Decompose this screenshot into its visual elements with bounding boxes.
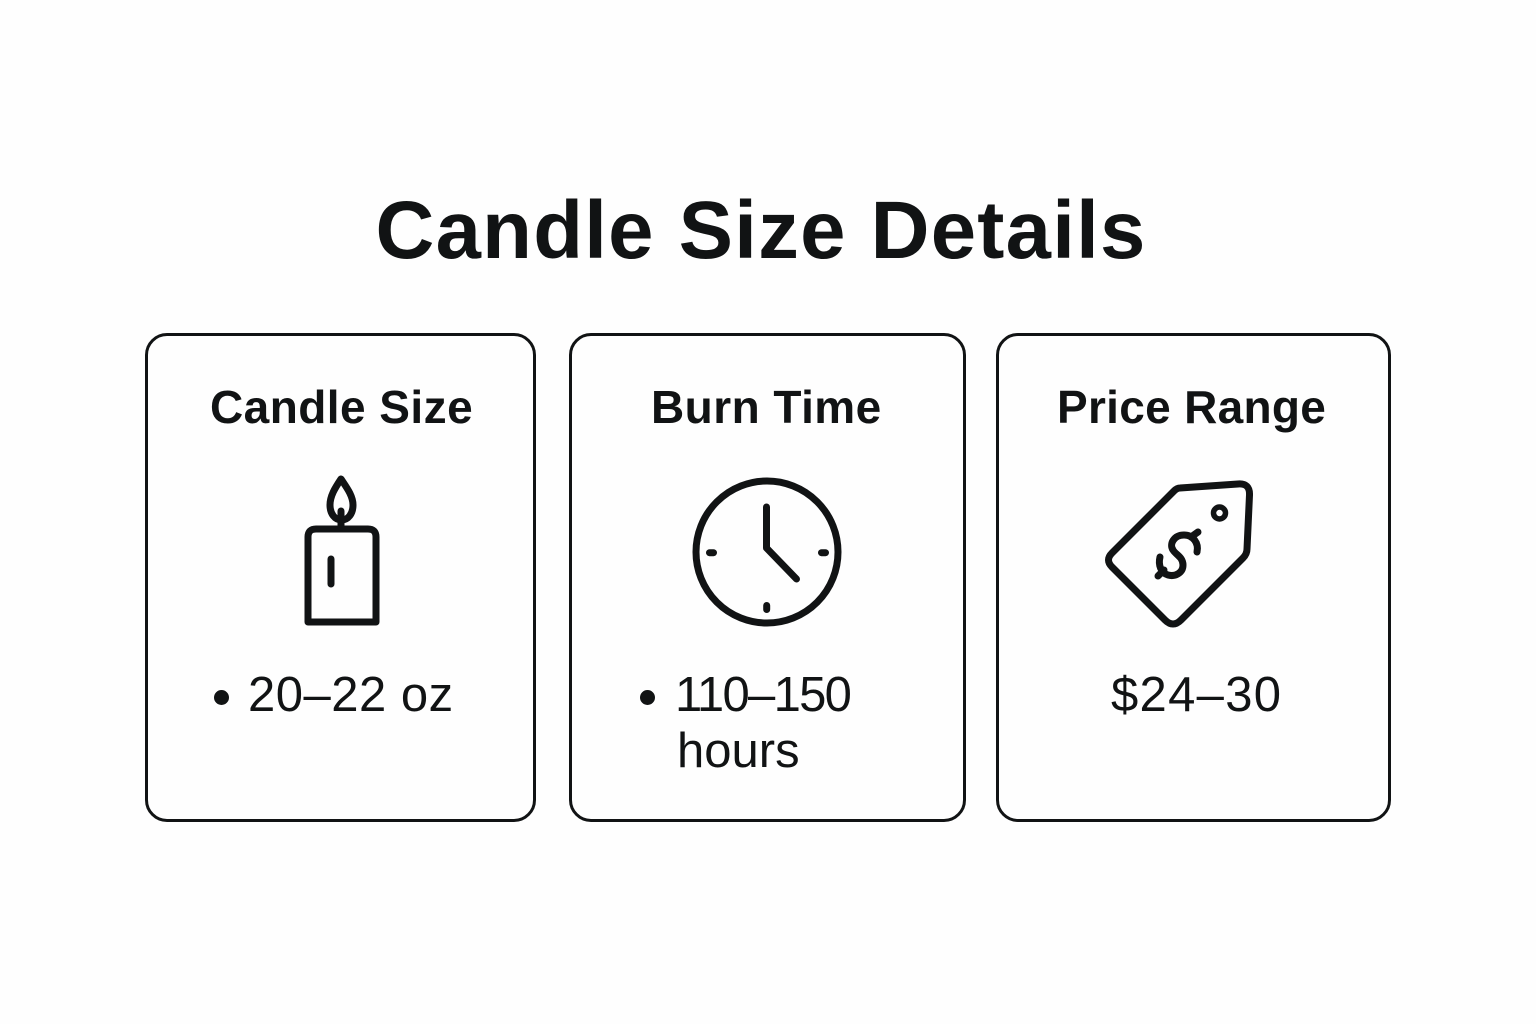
heading: price range: Price Range — [1057, 381, 1326, 433]
panel: candle size — [145, 333, 536, 822]
heading: candle size: Candle Size — [210, 381, 473, 433]
bullet: candle size — [214, 690, 229, 705]
text: price range value: $24–30 — [1111, 668, 1282, 722]
panel: burn time — [569, 333, 966, 822]
text: burn time value: 110–150 — [675, 668, 850, 722]
bullet: burn time — [640, 690, 655, 705]
text: burn time unit: hours — [677, 724, 800, 778]
panel: price range — [996, 333, 1391, 822]
heading: burn time: Burn Time — [651, 381, 882, 433]
text: candle size value: 20–22 oz — [248, 668, 454, 722]
title: Candle Size Details — [376, 185, 1147, 276]
